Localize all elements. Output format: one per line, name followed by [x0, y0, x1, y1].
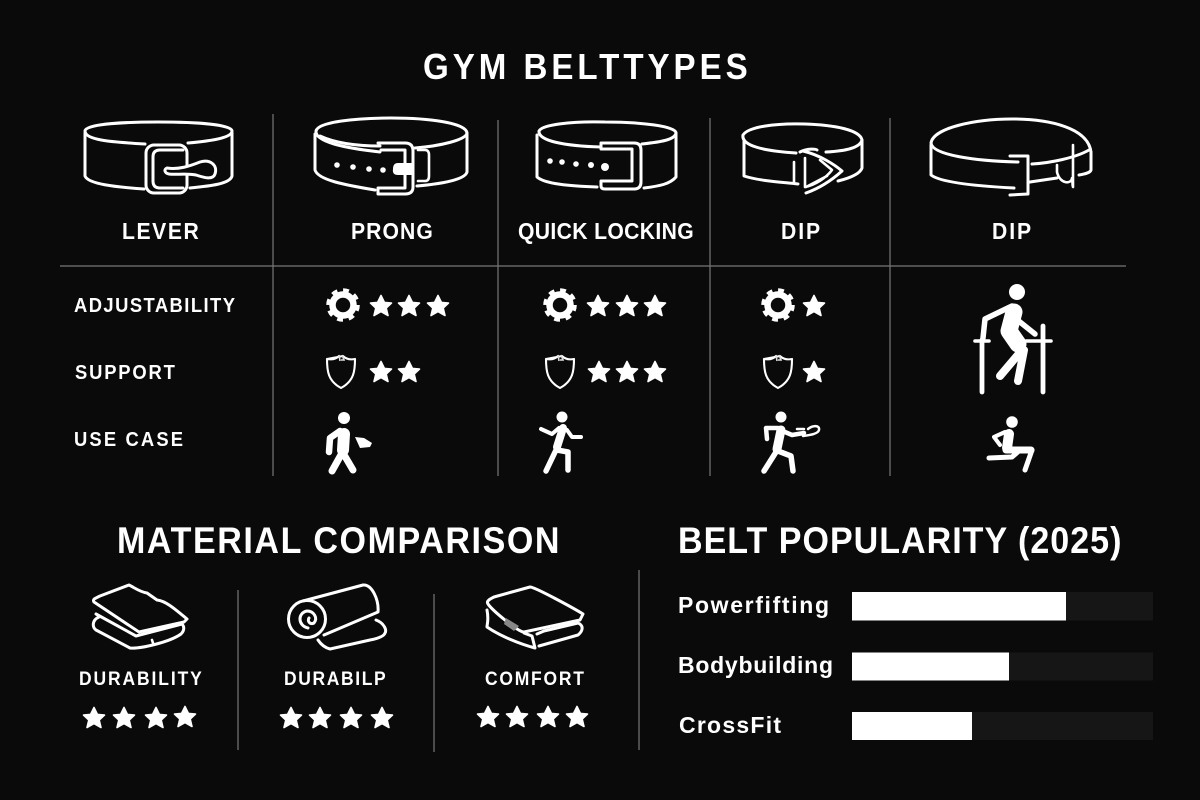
row label: use case: USE CASE: [74, 429, 183, 451]
label: durabilp: DURABILP: [284, 667, 386, 689]
label: prong: PRONG: [351, 218, 433, 244]
rating stars: [280, 708, 392, 728]
panel: dip belt one: [743, 124, 862, 244]
panel: quick locking belt: [518, 122, 694, 244]
panel: lever belt: [85, 122, 232, 244]
heading: material comparison: MATERIAL COMPARISON: [117, 520, 560, 561]
label: comfort: COMFORT: [485, 667, 584, 689]
rating: quick locking support: [546, 355, 666, 388]
label: dip: DIP: [781, 218, 820, 244]
rating stars: [84, 706, 196, 728]
heading: belt popularity: BELT POPULARITY (2025): [678, 520, 1121, 561]
icon: figure on dip bars: [975, 284, 1051, 392]
panel: material second: [280, 585, 392, 728]
rating: dip support: [764, 355, 824, 388]
icon: dip belt alternate: [931, 119, 1091, 195]
rating: prong support: [327, 355, 420, 388]
rating: quick locking adjustability: [545, 290, 666, 320]
icon: figure squatting: [989, 416, 1032, 470]
row label: adjustability: ADJUSTABILITY: [74, 295, 235, 317]
panel: material comfort: [478, 587, 588, 726]
rating: dip adjustability: [763, 290, 824, 320]
bar: bodybuilding: [678, 652, 1153, 680]
icon: folded padded material: [487, 587, 583, 648]
label: lever: LEVER: [122, 218, 199, 244]
title: GYM BELTTYPES: [423, 48, 748, 87]
row label: support: SUPPORT: [75, 362, 175, 384]
icon: lever belt: [85, 122, 232, 193]
panel: prong belt: [315, 118, 467, 244]
icon: folded material: [93, 585, 187, 648]
bar: bodybuilding: Bodybuilding: [678, 652, 833, 678]
icon: person throwing, dip use case: [764, 412, 819, 471]
panel: material durability: [79, 585, 202, 728]
rating stars: [478, 706, 588, 726]
bar: crossfit: CrossFit: [679, 712, 781, 738]
bar: powerlifting: Powerfifting: [678, 592, 829, 618]
panel: dip belt two: [931, 119, 1091, 244]
rating: prong adjustability: [328, 290, 448, 320]
label: quick locking: QUICK LOCKING: [518, 218, 694, 244]
icon: person walking, quick locking use case: [541, 412, 581, 471]
icon: person carrying, prong use case: [329, 412, 372, 471]
icon: dip belt: [743, 124, 862, 193]
icon: rolled material: [288, 585, 386, 649]
bar: powerlifting: [678, 592, 1153, 620]
label: durability: DURABILITY: [79, 667, 202, 689]
bar chart: belt popularity: [678, 592, 1153, 740]
bar: crossfit: [679, 712, 1153, 740]
icon: prong belt: [315, 118, 467, 194]
label: dip alternate: DIP: [992, 218, 1031, 244]
icon: quick locking belt: [537, 122, 676, 189]
